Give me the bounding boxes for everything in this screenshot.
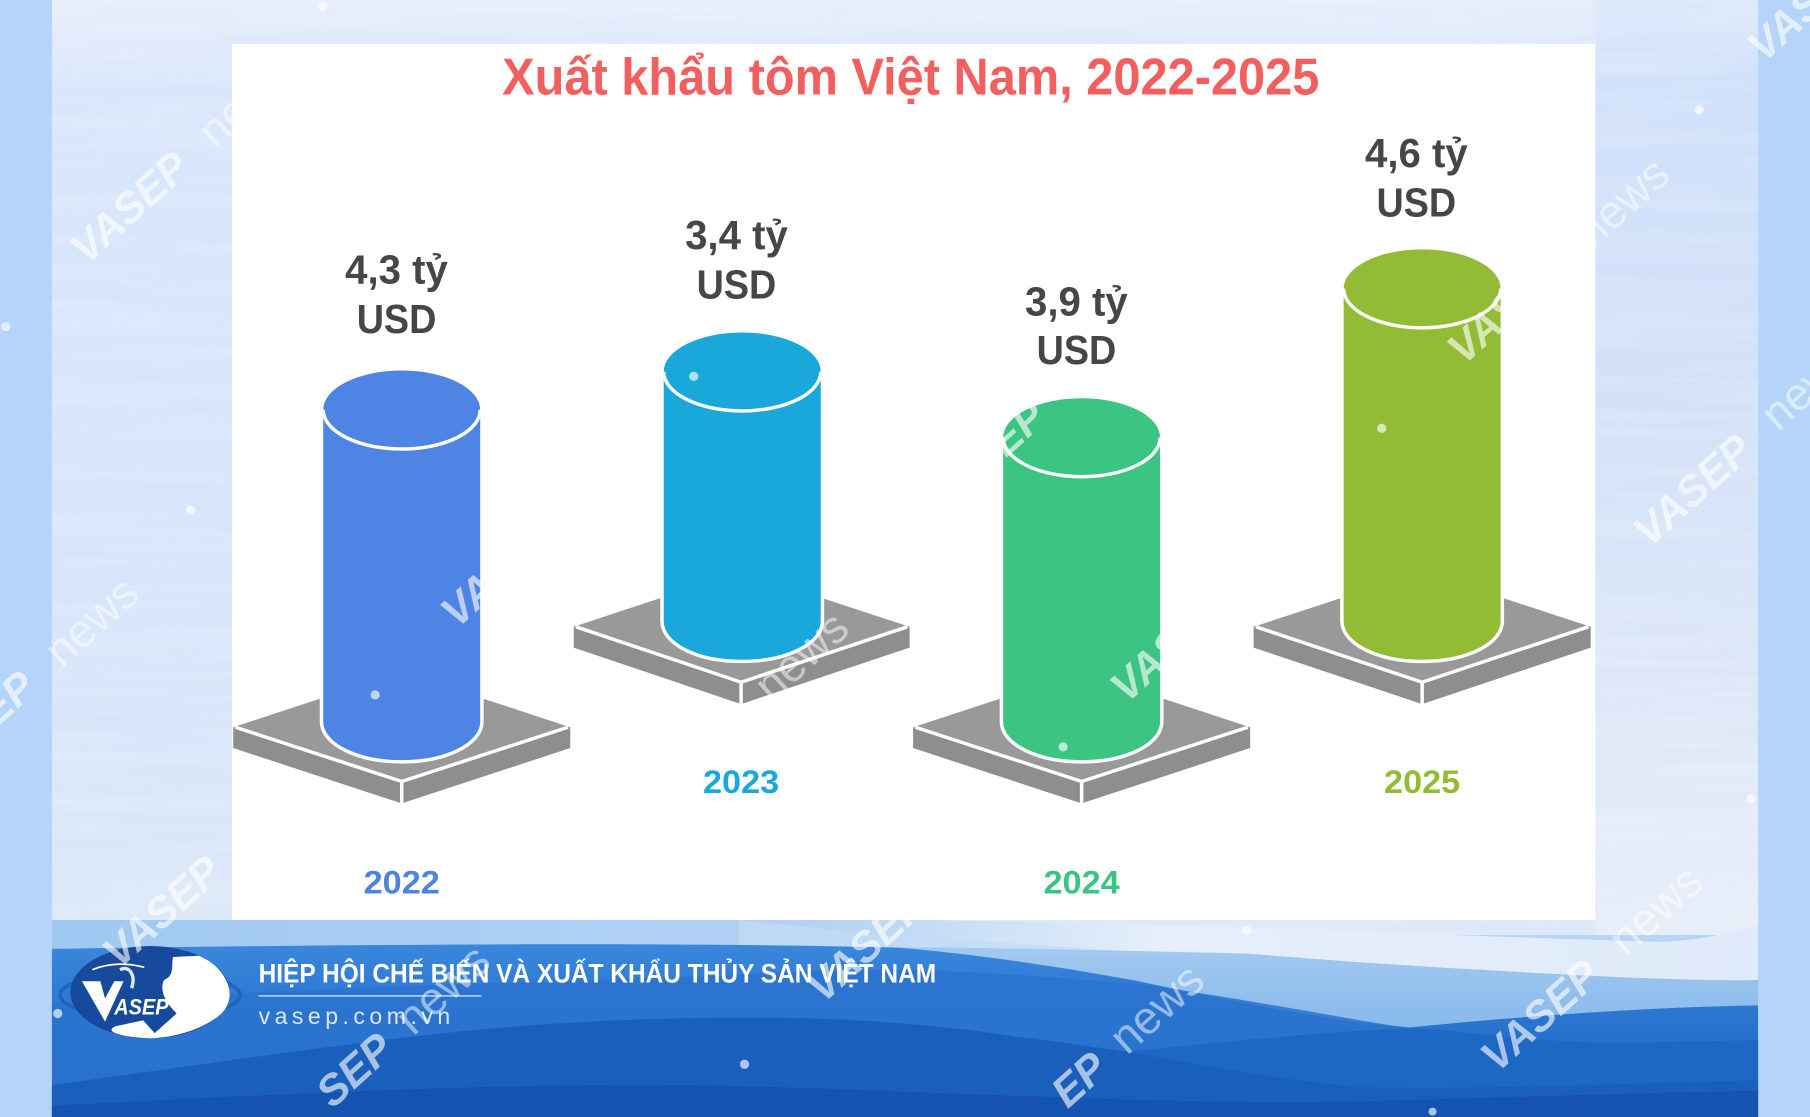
footer divider bbox=[259, 995, 481, 997]
watermarks: VASEP bbox=[798, 881, 935, 1012]
watermarks: news bbox=[1598, 854, 1713, 965]
sky background bbox=[52, 0, 1758, 935]
value 2023: 3,4 tỷ bbox=[685, 212, 788, 258]
icon: VASEP logo: ASEP bbox=[113, 995, 169, 1020]
value 2024: USD bbox=[1037, 327, 1116, 373]
watermarks: VASEP bbox=[1438, 243, 1576, 373]
bar 2022 bbox=[233, 246, 570, 900]
year 2024: 2024 bbox=[1044, 864, 1120, 900]
watermarks: news bbox=[558, 410, 673, 521]
watermarks: VASEP bbox=[1472, 950, 1609, 1081]
watermarks: news bbox=[385, 933, 500, 1044]
watermarks: VASEP bbox=[93, 846, 231, 977]
footer website: vasep.com.vn bbox=[259, 1003, 450, 1029]
watermarks: news bbox=[34, 566, 149, 677]
cylinder 2022 bbox=[321, 371, 482, 762]
cylinder 2023 bbox=[662, 332, 822, 661]
value 2022 bbox=[345, 246, 448, 342]
footer organisation name: HIỆP HỘI CHẾ BIẾN VÀ XUẤT KHẨU THỦY SẢN VIỆT NAM bbox=[259, 958, 936, 988]
title: Xuất khẩu tôm Việt Nam, 2022-2025 bbox=[502, 49, 1319, 107]
chart: shrimp export cylinders bbox=[233, 130, 1591, 900]
watermarks: news bbox=[1099, 953, 1214, 1063]
value 2025: USD bbox=[1377, 179, 1456, 225]
year 2023: 2023 bbox=[703, 764, 779, 800]
year 2022: 2022 bbox=[364, 864, 440, 900]
base platform 2025 bbox=[1254, 571, 1591, 704]
cylinder 2024 bbox=[1001, 398, 1162, 762]
watermarks: news bbox=[187, 46, 302, 157]
base platform 2022 bbox=[233, 672, 570, 803]
value 2022: USD bbox=[357, 296, 436, 342]
base platform 2023 bbox=[574, 571, 910, 704]
watermarks: VASEP bbox=[1624, 425, 1762, 556]
value 2023: USD bbox=[697, 261, 776, 307]
watermarks: VASEP bbox=[61, 142, 199, 273]
value 2023 bbox=[685, 212, 788, 307]
icon: VASEP logo bbox=[60, 946, 240, 1038]
value 2025: 4,6 tỷ bbox=[1365, 130, 1468, 176]
value 2024: 3,9 tỷ bbox=[1025, 279, 1128, 325]
watermarks: VASEP bbox=[918, 392, 1055, 522]
panel: chart background bbox=[232, 44, 1595, 920]
value 2024 bbox=[1025, 279, 1128, 373]
bar 2025 bbox=[1254, 130, 1591, 800]
cylinder 2025 bbox=[1342, 249, 1502, 661]
watermarks: news bbox=[744, 600, 858, 711]
value 2025 bbox=[1365, 130, 1468, 225]
watermarks: EP bbox=[1042, 1043, 1117, 1117]
watermarks: news bbox=[1564, 147, 1679, 257]
watermarks: VASEP bbox=[1101, 581, 1239, 712]
base platform 2024 bbox=[913, 672, 1250, 803]
watermarks: SEP bbox=[307, 1024, 403, 1117]
value 2022: 4,3 tỷ bbox=[345, 246, 448, 292]
bar 2023 bbox=[574, 212, 910, 800]
bar 2024 bbox=[913, 279, 1250, 900]
watermarks: VASEP bbox=[432, 506, 569, 637]
footer waves bbox=[52, 920, 1758, 1117]
year 2025: 2025 bbox=[1384, 764, 1460, 800]
